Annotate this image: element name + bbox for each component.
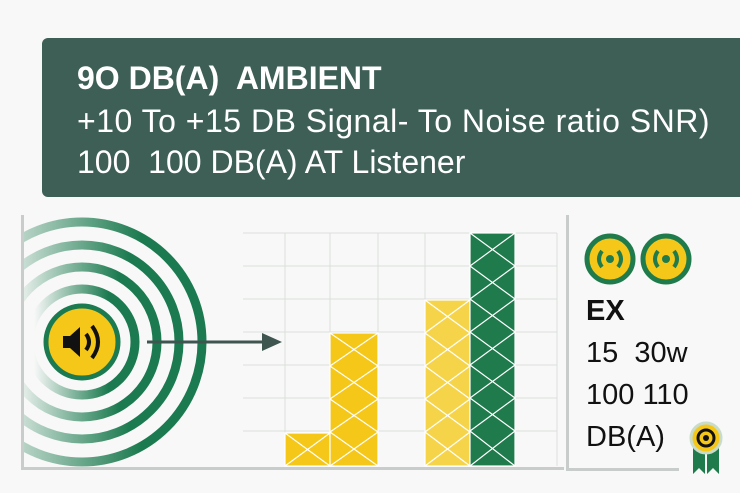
spec text: 100 110 (586, 379, 689, 411)
bar chart (243, 232, 558, 466)
spec text: 15 30w (586, 337, 688, 369)
icon: sound waves with speaker (24, 218, 282, 466)
spec text (586, 295, 689, 453)
icon: award ribbon (690, 422, 722, 474)
speaker icon (46, 306, 118, 378)
panel: right specs (566, 215, 679, 471)
spec text: EX (586, 295, 625, 327)
icons: two speakers (584, 234, 692, 284)
heading: 9O DB(A) AMBIENT (77, 60, 382, 96)
subtitle line 1: +10 To +15 DB Signal- To Noise ratio SNR) (77, 103, 710, 139)
arrow (147, 333, 282, 351)
subtitle line 2: 100 100 DB(A) AT Listener (77, 144, 465, 180)
spec text: DB(A) (586, 421, 665, 453)
panel: left frame (21, 215, 564, 470)
header panel (42, 38, 740, 197)
